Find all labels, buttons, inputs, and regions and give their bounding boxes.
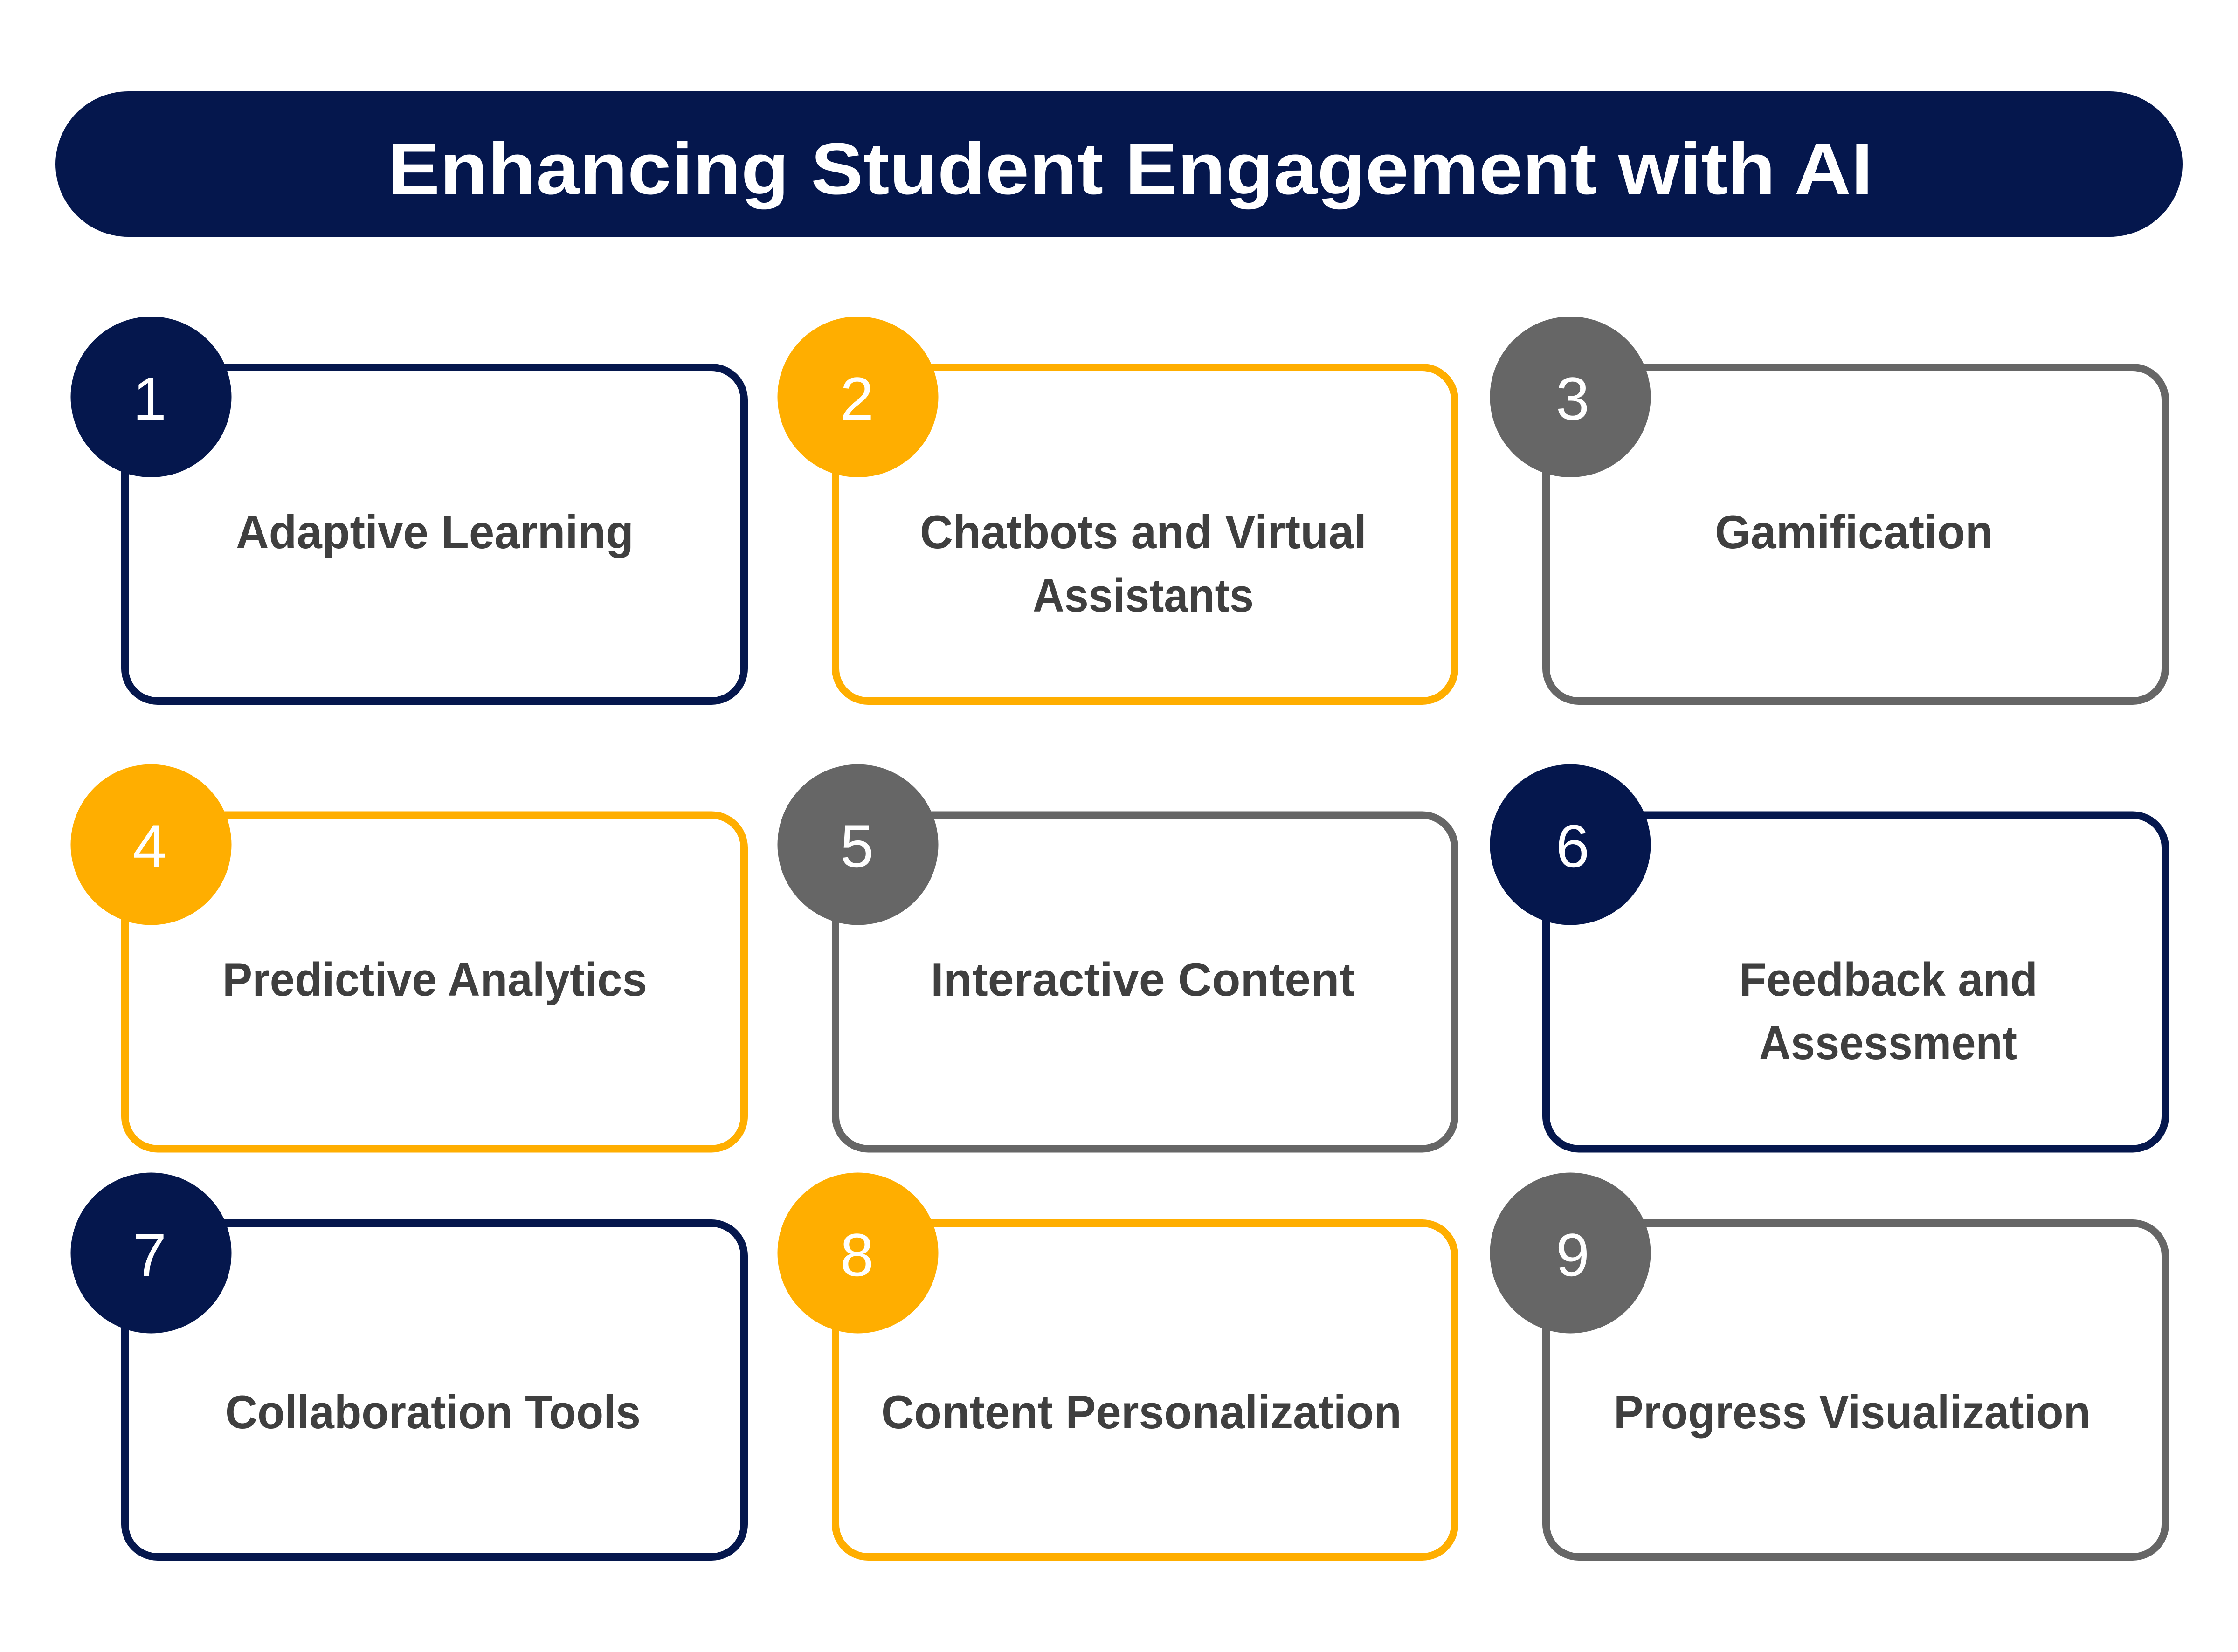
panel: card 7 Collaboration Tools: [71, 1173, 744, 1557]
card outline: [125, 815, 744, 1149]
number badge 6: [1490, 764, 1651, 925]
number badge 1: 1: [133, 365, 166, 433]
label: Chatbots and Virtual: [920, 506, 1367, 558]
number badge 2: 2: [840, 365, 874, 433]
card outline: [1546, 815, 2165, 1149]
card outline: [836, 367, 1455, 701]
number badge 5: 5: [840, 812, 874, 880]
label: [920, 506, 1367, 622]
panel: card 5 Interactive Content: [778, 764, 1455, 1149]
label: Progress Visualization: [1614, 1386, 2091, 1439]
label: Collaboration Tools: [225, 1386, 641, 1439]
number badge 6: 6: [1556, 812, 1589, 880]
number badge 9: 9: [1556, 1221, 1589, 1289]
panel: card 9 Progress Visualization: [1490, 1173, 2165, 1557]
number badge 4: 4: [133, 812, 166, 880]
label: Feedback and: [1739, 954, 2038, 1006]
label: Assessment: [1759, 1017, 2017, 1069]
card outline: [1546, 1223, 2165, 1557]
label: [1739, 954, 2038, 1069]
panel: card 8 Content Personalization: [778, 1173, 1455, 1557]
title bar: [55, 91, 2183, 237]
panel: card 4 Predictive Analytics: [71, 764, 744, 1149]
number badge 8: 8: [840, 1221, 874, 1289]
label: Assistants: [1033, 570, 1254, 622]
label: Adaptive Learning: [236, 506, 634, 558]
panel: card 1 Adaptive Learning: [71, 317, 744, 701]
number badge 2: [778, 317, 938, 477]
card outline: [125, 367, 744, 701]
panel: card 6 Feedback and Assessment: [1490, 764, 2165, 1149]
label: Content Personalization: [881, 1386, 1402, 1439]
number badge 8: [778, 1173, 938, 1333]
card outline: [836, 1223, 1455, 1557]
label: Interactive Content: [931, 954, 1355, 1006]
card outline: [836, 815, 1455, 1149]
number badge 4: [71, 764, 231, 925]
number badge 5: [778, 764, 938, 925]
panel: card 3 Gamification: [1490, 317, 2165, 701]
label: Predictive Analytics: [222, 954, 647, 1006]
title banner: [55, 91, 2183, 237]
number badge 7: 7: [133, 1221, 166, 1289]
label: Gamification: [1715, 506, 1993, 558]
number badge 9: [1490, 1173, 1651, 1333]
number badge 3: 3: [1556, 365, 1589, 433]
card outline: [1546, 367, 2165, 701]
panel: card 2 Chatbots and Virtual Assistants: [778, 317, 1455, 701]
number badge 1: [71, 317, 231, 477]
title text: Enhancing Student Engagement with AI: [387, 128, 1873, 210]
card outline: [125, 1223, 744, 1557]
number badge 3: [1490, 317, 1651, 477]
number badge 7: [71, 1173, 231, 1333]
